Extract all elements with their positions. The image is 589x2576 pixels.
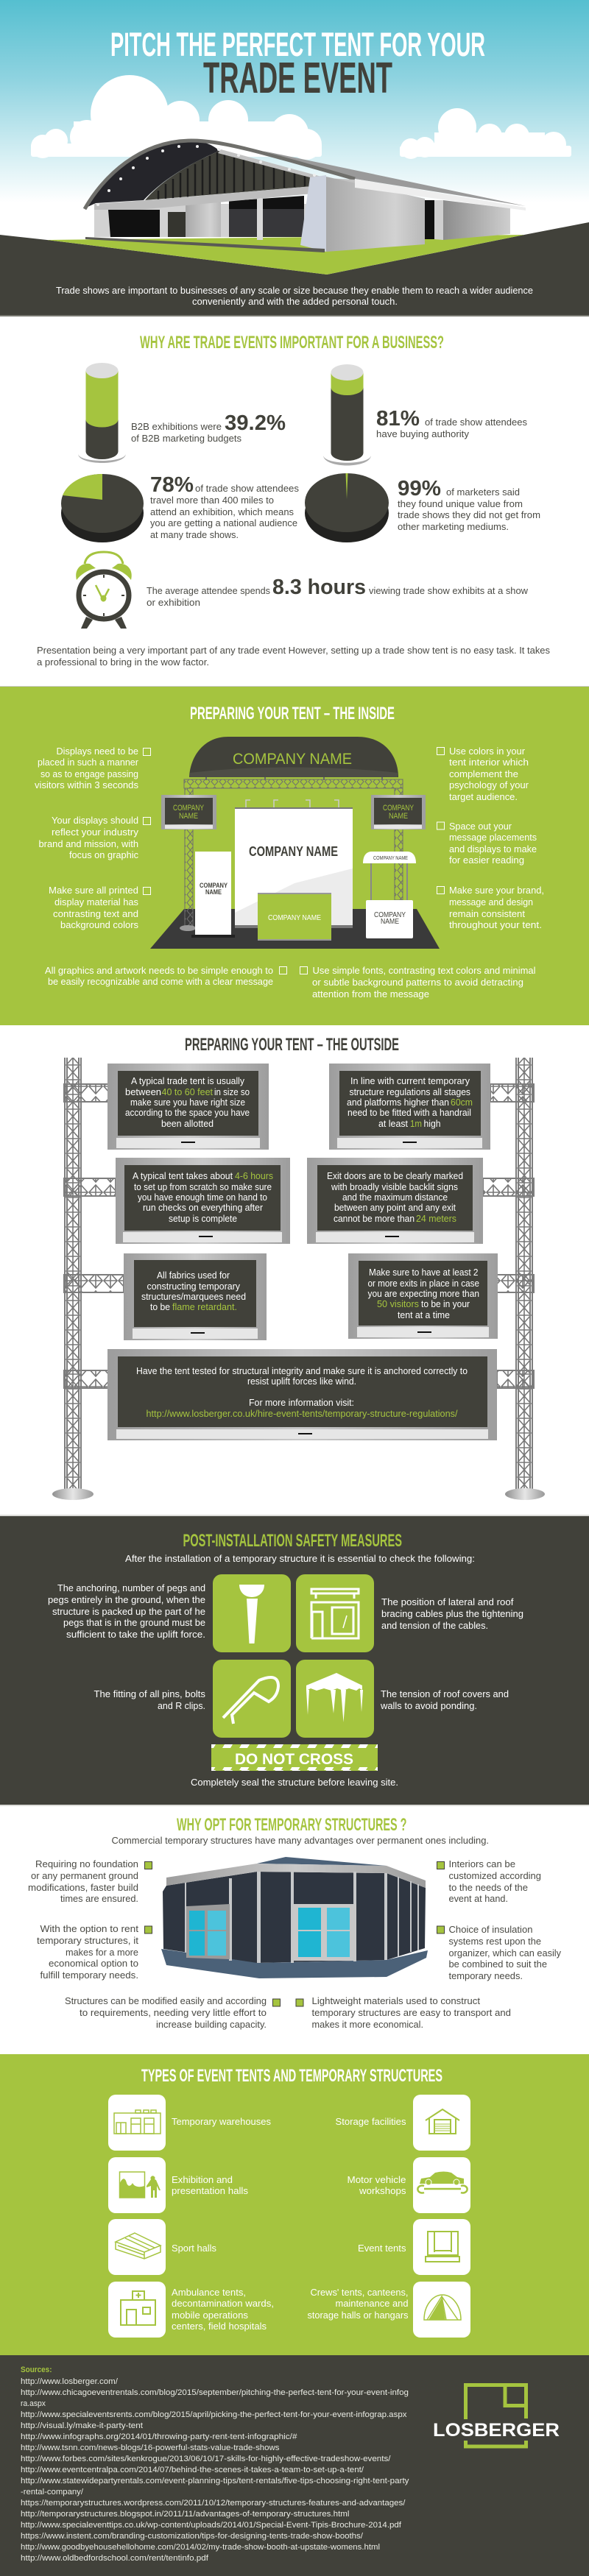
screen: set-up time: to set up from scratch so make sure <box>134 1182 272 1192</box>
sources list: http://www.infographs.org/2014/01/throwing-party-rent-tent-infographic/# <box>21 2432 297 2441</box>
do not cross tape: DO NOT CROSS <box>235 1751 353 1768</box>
sources list: http://www.tsnn.com/news-blogs/16-powerful-stats-value-trade-shows <box>21 2444 280 2452</box>
tip: simple artwork <box>45 965 287 987</box>
tip: consistency: remain consistent <box>449 908 525 919</box>
exhibition booth illustration: NAME <box>389 812 408 821</box>
tip: consistency: message and design <box>449 896 533 907</box>
screen: fabrics: to be <box>150 1302 170 1312</box>
tile: ambulance tents <box>108 2282 274 2338</box>
tip: colours <box>437 746 529 802</box>
text: bracing cables: The position of lateral and roof <box>381 1596 514 1607</box>
screen: tent size: in size so <box>214 1087 250 1097</box>
intro text: Trade shows are important to businesses of any scale or size because they enable them to reach a wider audience <box>56 285 533 296</box>
sources list: https://temporarystructures.wordpress.com/2011/10/12/temporary-structures-features-and-advantages/ <box>21 2499 406 2508</box>
tip: displays placement: so as to engage passing <box>40 768 138 779</box>
screen: handrails: high <box>424 1119 441 1129</box>
heading: WHY OPT FOR TEMPORARY STRUCTURES ? <box>177 1815 406 1835</box>
screen: tent size: been allotted <box>161 1119 214 1129</box>
screen: set-up time: run checks on everything after <box>143 1203 263 1213</box>
benefit: rent: fulfill temporary needs. <box>40 1970 138 1981</box>
tile: temporary warehouses: Temporary warehouses <box>172 2116 271 2127</box>
screen: exit doors: and the maximum distance <box>342 1192 448 1203</box>
benefit: insulation: organizer, which can easily <box>449 1947 561 1958</box>
tile: exhibition halls: Exhibition and <box>172 2174 233 2185</box>
sources list: Sources: <box>21 2366 52 2374</box>
text: presentation note <box>37 645 550 668</box>
tip: colours: Use colors in your <box>449 746 526 757</box>
pie chart 99% <box>305 473 389 542</box>
benefit: modified: increase building capacity. <box>156 2019 267 2030</box>
tip: contrast: Make sure all printed <box>49 885 138 896</box>
tile: temporary warehouses <box>108 2095 271 2151</box>
dark ground <box>0 222 589 315</box>
stat: 99%: of marketers said <box>446 486 520 498</box>
screen: exits: to be in your <box>421 1299 470 1309</box>
screen: fabrics: All fabrics used for <box>157 1270 230 1281</box>
stat: 8.3 hours: viewing trade show exhibits at a show <box>369 585 529 596</box>
exhibition booth illustration: NAME <box>179 812 198 821</box>
benefit: insulation: temporary needs. <box>449 1970 523 1981</box>
tip: simple fonts: or subtle background patterns to avoid detracting <box>312 977 523 988</box>
tip: spacing: message placements <box>449 832 537 843</box>
tip: spacing <box>437 821 537 866</box>
exhibition booth illustration: COMPANY <box>200 882 228 890</box>
sources list: http://temporarystructures.blogspot.in/2011/11/advantages-of-temporary-structures.html <box>21 2510 350 2519</box>
tip: displays placement <box>35 746 150 790</box>
text: anchoring: structure is packed up the part of he <box>52 1606 205 1617</box>
tip: consistency <box>437 885 544 930</box>
title <box>110 26 485 102</box>
stat: 78%: you are getting a national audience <box>150 517 297 528</box>
stat: 8.3 hours: or exhibition <box>147 597 200 608</box>
benefit: lightweight <box>296 1995 511 2030</box>
title: TRADE EVENT <box>203 54 392 102</box>
screen: structural integrity: Have the tent tested for structural integrity and make sure it is anchored correctly to <box>136 1366 468 1376</box>
stat: 99%: they found unique value from <box>398 498 523 509</box>
text: anchoring: The anchoring, number of pegs and <box>57 1582 205 1593</box>
benefit: interiors <box>437 1858 541 1904</box>
panel: why trade events are important <box>37 333 550 668</box>
stat: 99%: 99% <box>398 477 441 500</box>
tile: exhibition halls: presentation halls <box>172 2185 249 2196</box>
text: pins: The fitting of all pins, bolts <box>94 1688 205 1699</box>
cloud left <box>31 75 322 160</box>
screen: handrails: and platforms higher than <box>347 1097 449 1108</box>
stat: 78%: travel more than 400 miles to <box>150 495 274 506</box>
exhibition booth illustration: COMPANY NAME <box>373 856 408 861</box>
sources list: http://visual.ly/make-it-party-tent <box>21 2421 143 2430</box>
benefit: no foundation: times are ensured. <box>60 1893 138 1904</box>
tile: ambulance tents: centers, field hospitals <box>172 2321 267 2332</box>
heading: PREPARING YOUR TENT – THE INSIDE <box>190 704 395 723</box>
tip: reflect brand: Your displays should <box>52 815 138 826</box>
do not cross tape <box>211 1744 378 1771</box>
exhibition booth illustration: COMPANY <box>173 804 204 813</box>
tile: exhibition halls <box>108 2157 249 2213</box>
text: bracing cables: and tension of the cables. <box>381 1620 488 1631</box>
stat: 78%: at many trade shows. <box>150 529 239 540</box>
sources list: http://www.goodbyehousehellohome.com/2014/02/my-trade-show-booth-at-upstate-womens.html <box>21 2543 380 2552</box>
lights <box>96 145 316 206</box>
tile: sport halls <box>108 2219 216 2275</box>
intro: Commercial temporary structures have many advantages over permanent ones including. <box>112 1835 489 1846</box>
exhibition booth illustration: NAME <box>381 918 399 926</box>
screen: tent size: between <box>125 1087 161 1097</box>
tile: sport halls: Sport halls <box>172 2243 216 2254</box>
exhibition booth illustration: COMPANY NAME <box>268 914 321 922</box>
sources list: -rental-company/ <box>21 2488 84 2497</box>
screen: exits: or more exits in place in case <box>368 1278 479 1289</box>
text: anchoring: pegs that is in the ground must be <box>63 1617 205 1628</box>
panel: hero header <box>0 0 589 316</box>
text: roof covers <box>380 1688 509 1711</box>
green counter <box>258 893 331 941</box>
roll-up banner <box>195 852 231 935</box>
tile: storage facilities <box>336 2095 470 2151</box>
screen: exit doors: with broadly visible backlit signs <box>331 1182 458 1192</box>
tip: simple fonts: attention from the message <box>312 988 429 999</box>
text: anchoring: sufficient to take the uplift force. <box>66 1629 205 1640</box>
tile: ambulance tents: Ambulance tents, <box>172 2287 246 2298</box>
screen: exit doors <box>307 1158 483 1244</box>
tile: motor vehicle workshops <box>348 2157 470 2213</box>
text: bracing cables <box>381 1596 523 1631</box>
stat: 81% <box>376 407 527 439</box>
screen: tent size: make sure you have right size <box>130 1097 245 1108</box>
screen: structural integrity <box>107 1349 497 1440</box>
screen: exit doors: Exit doors are to be clearly marked <box>327 1171 463 1181</box>
text: roof covers: walls to avoid ponding. <box>380 1700 477 1711</box>
text: anchoring: pegs entirely in the ground, when the <box>48 1594 205 1605</box>
sources list: http://www.chicagoeventrentals.com/blog/2015/september/pitching-the-perfect-tent-for-your-event-infog <box>21 2388 409 2397</box>
tip: simple artwork: All graphics and artwork needs to be simple enough to <box>45 965 273 976</box>
screen: fabrics <box>124 1253 267 1340</box>
exhibition booth illustration <box>150 737 440 949</box>
stat: 8.3 hours: 8.3 hours <box>272 576 366 599</box>
exhibition booth illustration: NAME <box>205 888 222 896</box>
stat: 99%: other marketing mediums. <box>398 521 509 532</box>
sources list: http://www.specialeventtips.co.uk/wp-content/uploads/2014/01/Special-Event-Tipis-Brochure-2014.pdf <box>21 2521 402 2530</box>
cylinder chart 81% <box>323 364 371 465</box>
screen: exits: you are expecting more than <box>368 1289 479 1299</box>
tip: displays placement: Displays need to be <box>56 746 138 757</box>
stat: 78%: 78% <box>150 473 194 497</box>
tile: ambulance tents: decontamination wards, <box>172 2298 274 2309</box>
benefit: modified: to requirements, needing very little effort to <box>80 2007 267 2018</box>
screen: tent size: 40 to 60 feet <box>162 1087 214 1097</box>
tile: storage facilities: Storage facilities <box>336 2116 406 2127</box>
benefit: interiors: Interiors can be <box>449 1858 515 1869</box>
screen: handrails: structure regulations all stages <box>349 1087 470 1097</box>
stat: 39.2%: B2B exhibitions were <box>131 421 222 432</box>
screen: fabrics: constructing temporary <box>147 1281 241 1292</box>
tile: crews' tents: storage halls or hangars <box>308 2310 409 2321</box>
screen: structural integrity: For more information visit: <box>249 1398 354 1408</box>
exhibition booth illustration: COMPANY <box>383 804 414 813</box>
stat: 99%: trade shows they did not get from <box>398 509 540 520</box>
text: presentation note: Presentation being a very important part of any trade event However, setting up a trade show tent is no easy task. It takes <box>37 645 550 656</box>
stat: 81%: 81% <box>376 407 420 431</box>
tip: spacing: and displays to make <box>449 843 537 854</box>
panel: sources footer <box>0 2355 589 2576</box>
tip: reflect brand: focus on graphic <box>69 849 138 860</box>
panel: preparing the inside <box>0 686 589 1025</box>
stat: 8.3 hours <box>147 576 529 608</box>
screen: exit doors: 24 meters <box>416 1214 456 1224</box>
stat: 39.2%: 39.2% <box>225 411 286 435</box>
sources list: ra.aspx <box>21 2399 46 2408</box>
text: presentation note: a professional to bring in the wow factor. <box>37 657 209 668</box>
screen: set-up time: 4-6 hours <box>235 1171 273 1181</box>
benefit: modified <box>65 1995 280 2030</box>
intro text <box>56 285 533 307</box>
tip: colours: psychology of your <box>449 779 529 790</box>
icon: peg <box>213 1574 291 1652</box>
benefit: no foundation <box>28 1858 152 1904</box>
benefit: insulation: systems rest upon the <box>449 1936 541 1947</box>
screen: exits <box>348 1253 498 1339</box>
sources list: http://www.forbes.com/sites/kenkrogue/2013/06/10/17-skills-for-highly-effective-tradeshow-events/ <box>21 2455 391 2463</box>
cylinder chart 39.2% <box>78 363 126 463</box>
tip: simple fonts: Use simple fonts, contrasting text colors and minimal <box>312 965 536 976</box>
tip: colours: tent interior which <box>449 757 529 768</box>
heading: PREPARING YOUR TENT – THE OUTSIDE <box>185 1035 399 1055</box>
stat: 8.3 hours: The average attendee spends <box>147 585 270 596</box>
tip: reflect brand <box>38 815 150 860</box>
benefit: modified: Structures can be modified easily and according <box>65 1995 267 2006</box>
tip: simple fonts <box>300 965 536 999</box>
text: seal: Completely seal the structure before leaving site. <box>191 1777 398 1788</box>
benefit: no foundation: modifications, faster build <box>28 1882 138 1893</box>
sources list: https://www.instent.com/branding-customization/tips-for-designing-tents-trade-show-booths/ <box>21 2532 364 2541</box>
benefit: rent: With the option to rent <box>40 1923 138 1934</box>
screen: handrails <box>329 1064 490 1150</box>
kiosk <box>371 863 407 900</box>
intro text: conveniently and with the added personal touch. <box>192 296 398 307</box>
icon: canopy tent <box>296 1660 374 1738</box>
green lawn <box>47 235 524 275</box>
icon: bracing <box>296 1574 374 1652</box>
screen: fabrics: structures/marquees need <box>141 1292 246 1302</box>
tip: spacing: Space out your <box>449 821 512 832</box>
tip: reflect brand: reflect your industry <box>52 827 139 838</box>
benefit: lightweight: makes it more economical. <box>312 2019 423 2030</box>
screen: tent size: A typical trade tent is usually <box>131 1076 245 1086</box>
logo: Losberger <box>433 2385 560 2446</box>
text: anchoring <box>48 1582 205 1640</box>
screen: structural integrity: http://www.losberger.co.uk/hire-event-tents/temporary-structure-regulations/ <box>146 1409 458 1419</box>
logo: Losberger: LOSBERGER <box>433 2420 560 2441</box>
exhibition booth illustration: COMPANY NAME <box>233 751 352 768</box>
panel: preparing the outside <box>52 1035 545 1500</box>
screen left <box>161 795 216 829</box>
stat: 78% <box>150 473 300 540</box>
icon: R clip <box>213 1660 291 1738</box>
sources list: http://www.specialeventsrents.com/blog/2015/april/picking-the-perfect-tent-for-your-event-infograp.aspx <box>21 2410 407 2419</box>
tip: displays placement: placed in such a manner <box>38 757 139 768</box>
benefit: rent: economical option to <box>49 1958 138 1969</box>
benefit: rent: temporary structures, it <box>37 1935 138 1946</box>
stat: 81%: have buying authority <box>376 428 469 439</box>
intro: After the installation of a temporary structure it is essential to check the following: <box>125 1553 475 1564</box>
stat: 99% <box>398 477 540 532</box>
exhibition booth illustration: COMPANY NAME <box>249 844 338 859</box>
tip: spacing: for easier reading <box>449 854 524 866</box>
tip: reflect brand: brand and mission, with <box>38 838 138 849</box>
screen right <box>371 795 426 829</box>
sources list: http://www.oldbedfordschool.com/rent/tentinfo.pdf <box>21 2554 209 2563</box>
tip: contrast <box>49 885 150 930</box>
sources list <box>21 2366 409 2563</box>
screen: fabrics: flame retardant. <box>172 1302 237 1312</box>
benefit: insulation <box>437 1924 561 1981</box>
exhibition booth illustration: COMPANY <box>374 911 406 919</box>
tip: simple artwork: be easily recognizable and come with a clear message <box>48 976 273 987</box>
tip: contrast: contrasting text and <box>53 908 138 919</box>
text: roof covers: The tension of roof covers and <box>381 1688 509 1699</box>
tile: motor vehicle workshops: Motor vehicle <box>348 2174 406 2185</box>
screen: exits: Make sure to have at least 2 <box>369 1267 479 1278</box>
benefit: insulation: Choice of insulation <box>449 1924 533 1935</box>
benefit: lightweight: temporary structures are easy to transport and <box>312 2007 511 2018</box>
tip: consistency: Make sure your brand, <box>449 885 544 896</box>
stat: 78%: of trade show attendees <box>195 483 300 494</box>
screen: exit doors: between any point and any exit <box>334 1203 456 1213</box>
stat: 39.2%: of B2B marketing budgets <box>131 433 241 444</box>
panel: why temporary structures <box>28 1815 561 2030</box>
benefit: interiors: to the needs of the <box>449 1882 528 1893</box>
panel: post-installation safety <box>0 1515 589 1806</box>
benefit: insulation: be combined to suit the <box>449 1958 547 1970</box>
truss framework <box>52 1058 545 1500</box>
stat: 39.2% <box>131 411 286 444</box>
stat: 81%: of trade show attendees <box>425 417 527 428</box>
cloud right <box>400 108 571 159</box>
screen: tent size <box>107 1064 269 1150</box>
screen: exits: 50 visitors <box>377 1299 419 1309</box>
building illustration <box>161 1857 428 1978</box>
screen: handrails: 60cm <box>451 1097 473 1108</box>
sources list: http://www.statewidepartyrentals.com/event-planning-tips/tent-rentals/five-tips-choosing-right-tent-party <box>21 2477 409 2485</box>
stat: 78%: attend an exhibition, which means <box>150 506 294 517</box>
heading: POST-INSTALLATION SAFETY MEASURES <box>183 1531 402 1551</box>
tile: ambulance tents: mobile operations <box>172 2310 248 2321</box>
screen: exit doors: cannot be more than <box>334 1214 415 1224</box>
benefit: interiors: customized according <box>449 1870 541 1881</box>
tip: colours: target audience. <box>449 791 518 802</box>
benefit: lightweight: Lightweight materials used to construct <box>312 1995 480 2006</box>
screen: handrails: need to be fitted with a handrail <box>348 1108 471 1118</box>
tile: crews' tents <box>308 2282 470 2338</box>
tile: motor vehicle workshops: workshops <box>359 2185 406 2196</box>
benefit: no foundation: Requiring no foundation <box>35 1858 138 1869</box>
tip: consistency: throughout your tent. <box>449 919 542 930</box>
tile: crews' tents: Crews' tents, canteens, <box>311 2287 408 2298</box>
screen: set-up time: A typical tent takes about <box>133 1171 233 1181</box>
sources list: http://www.losberger.com/ <box>21 2377 119 2386</box>
text: bracing cables: bracing cables plus the tightening <box>381 1608 523 1619</box>
screen: set-up time: you have enough time on hand to <box>138 1192 267 1203</box>
benefit: no foundation: or any permanent ground <box>31 1870 138 1881</box>
screen: tent size: according to the space you have <box>125 1108 250 1118</box>
sources list: http://www.eventcentralpa.com/2014/07/behind-the-scenes-it-takes-a-team-to-set-up-a-tent/ <box>21 2466 364 2474</box>
screen: set-up time: setup is complete <box>169 1214 237 1224</box>
benefit: rent: makes for a more <box>66 1947 138 1958</box>
tile: crews' tents: maintenance and <box>336 2298 408 2309</box>
text: pins <box>94 1688 205 1711</box>
screen: exits: tent at a time <box>398 1310 450 1320</box>
tip: displays placement: visitors within 3 seconds <box>35 779 138 790</box>
tile: event tents: Event tents <box>358 2243 406 2254</box>
building illustration <box>85 141 526 252</box>
screen: handrails: 1m <box>410 1119 422 1129</box>
screen: handrails: at least <box>378 1119 409 1129</box>
screen: structural integrity: resist uplift forces like wind. <box>247 1376 356 1387</box>
screen: handrails: In line with current temporary <box>350 1076 470 1086</box>
tip: contrast: background colors <box>60 919 138 930</box>
tip: colours: complement the <box>449 768 518 779</box>
icon: alarm clock <box>76 552 132 629</box>
pie chart 78% <box>61 474 144 542</box>
benefit: interiors: event at hand. <box>449 1893 508 1904</box>
benefit: rent <box>37 1923 152 1981</box>
screen: set-up time <box>116 1158 290 1244</box>
tile: event tents <box>358 2219 470 2275</box>
tip: contrast: display material has <box>54 896 138 907</box>
panel: types of event tents <box>0 2054 589 2355</box>
text: pins: and R clips. <box>158 1700 205 1711</box>
